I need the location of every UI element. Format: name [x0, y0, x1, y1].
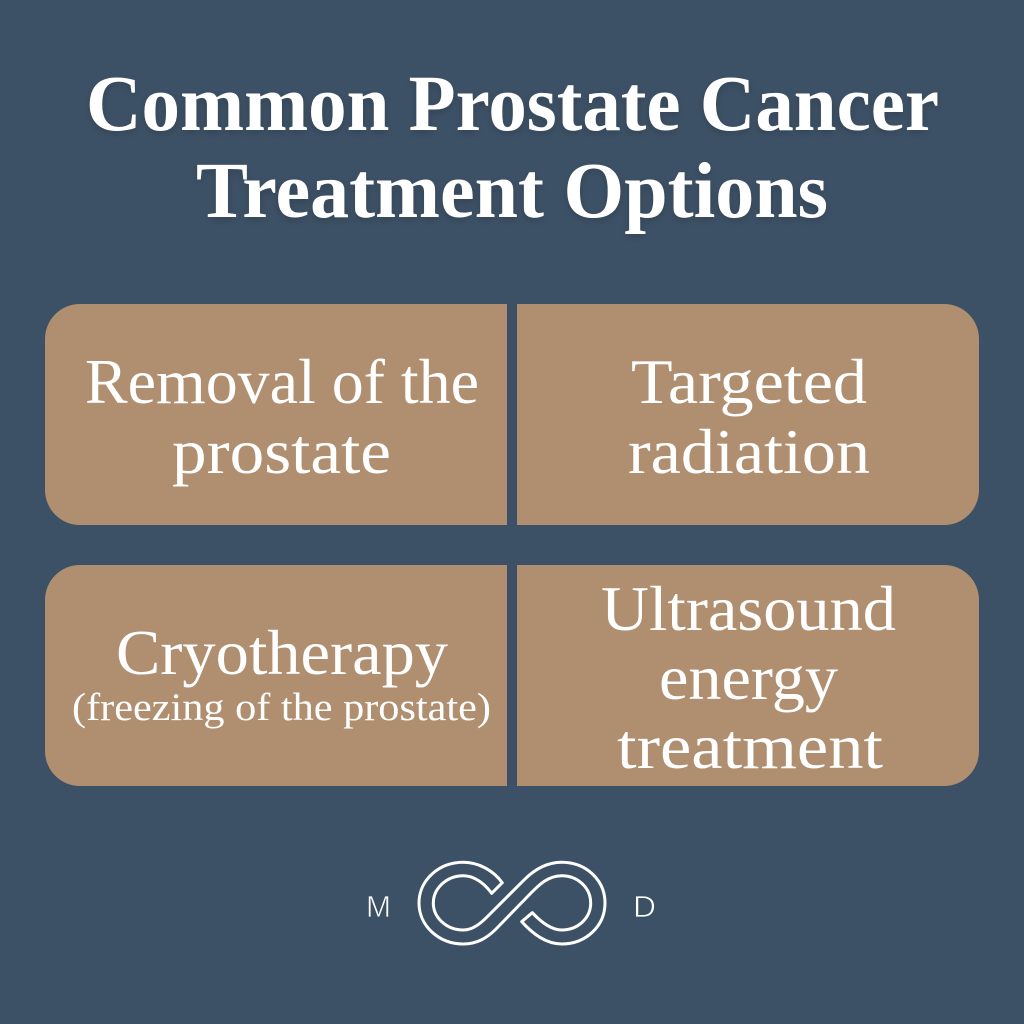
- panel: removal of the prostate: [45, 304, 507, 525]
- panel: ultrasound energy treatment: treatment: [617, 712, 884, 782]
- title: Treatment Options: [196, 148, 828, 235]
- logo: [366, 862, 656, 944]
- panel: ultrasound energy treatment: Ultrasound: [601, 574, 896, 644]
- panel: ultrasound energy treatment: [517, 565, 979, 786]
- panel: cryotherapy: [45, 565, 507, 786]
- panel: removal of the prostate: Removal of the: [85, 347, 479, 417]
- panel: cryotherapy: (freezing of the prostate): [72, 686, 491, 729]
- panel: removal of the prostate: prostate: [172, 417, 391, 487]
- panel: targeted radiation: radiation: [628, 417, 870, 487]
- panel: ultrasound energy treatment: energy: [659, 643, 839, 713]
- logo letter D: D: [633, 889, 656, 924]
- icon: infinity symbol: [419, 862, 605, 944]
- title: [86, 61, 939, 235]
- panel: targeted radiation: [517, 304, 979, 525]
- panel: targeted radiation: Targeted: [631, 347, 867, 417]
- panel: cryotherapy: Cryotherapy: [116, 618, 449, 688]
- logo letter M: M: [366, 889, 391, 924]
- title: Common Prostate Cancer: [86, 61, 939, 148]
